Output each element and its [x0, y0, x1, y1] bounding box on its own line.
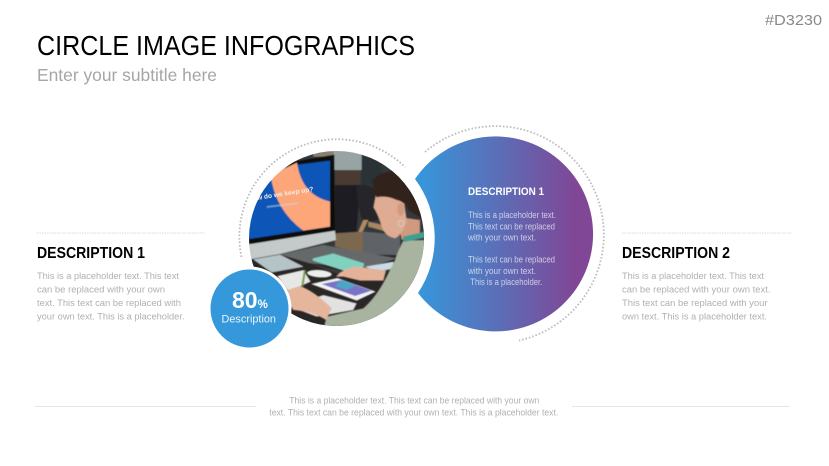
left description text: This is a placeholder text. This text: [37, 271, 179, 282]
dotted ring around image circle: [239, 139, 405, 257]
badge value: 80%: [232, 287, 268, 313]
tablet: [311, 278, 376, 301]
hoodie: [324, 240, 430, 330]
right description text: can be replaced with your own text.: [622, 284, 770, 296]
crescent text: with your own text.: [467, 266, 536, 276]
neck: [397, 217, 420, 240]
right description text: [622, 271, 770, 322]
screen text: w do we keep up?: [256, 186, 314, 202]
subtitle: Enter your subtitle here: [37, 65, 217, 85]
left description text: text. This text can be replaced with: [37, 298, 181, 309]
crescent heading: DESCRIPTION 1: [468, 186, 544, 198]
chair: [357, 185, 378, 223]
crescent text: This is a placeholder text.: [468, 210, 556, 220]
gradient crescent panel: [415, 136, 593, 331]
crescent text: with your own text.: [467, 233, 536, 243]
left description text: can be replaced with your own: [37, 284, 165, 296]
right description text: own text. This is a placeholder text.: [622, 312, 767, 322]
document code: #D3230: [765, 13, 822, 29]
keyboard: [277, 270, 311, 292]
panel: right description: [622, 233, 791, 322]
floor: [335, 232, 363, 253]
panel: left description: [37, 233, 205, 322]
desk: [252, 254, 397, 325]
paper: [290, 295, 357, 317]
title: CIRCLE IMAGE INFOGRAPHICS: [37, 30, 415, 61]
image circle: person working at a desk: [247, 148, 430, 330]
notebook: [313, 253, 364, 271]
collar: [403, 232, 427, 242]
badge label: Description: [222, 314, 276, 326]
right description heading: DESCRIPTION 2: [622, 245, 730, 262]
footer text: This is a placeholder text. This text can be replaced with your own: [289, 395, 539, 405]
right description text: This text can be replaced with your: [622, 298, 768, 309]
crescent text: This text can be replaced: [468, 254, 555, 264]
hair: [372, 171, 424, 220]
crescent text: This text can be replaced: [468, 221, 555, 231]
left description text: [37, 271, 184, 322]
monitor: [247, 155, 335, 245]
footer text: [269, 395, 558, 418]
crescent text: This is a placeholder.: [470, 277, 542, 287]
mouse: [307, 269, 332, 278]
crescent text: [467, 210, 556, 287]
ear and earring: [397, 203, 404, 216]
face: [372, 195, 407, 239]
percentage badge: [209, 268, 290, 349]
room background: [280, 151, 424, 284]
left description heading: DESCRIPTION 1: [37, 245, 145, 262]
right description text: This is a placeholder text. This text: [622, 271, 764, 282]
footer note: [35, 395, 790, 418]
left description text: your own text. This is a placeholder.: [37, 312, 184, 322]
hands: [287, 286, 332, 320]
dotted ring around gradient circle: [425, 126, 604, 340]
footer text: text. This text can be replaced with your own text. This is a placeholder text.: [269, 408, 558, 418]
